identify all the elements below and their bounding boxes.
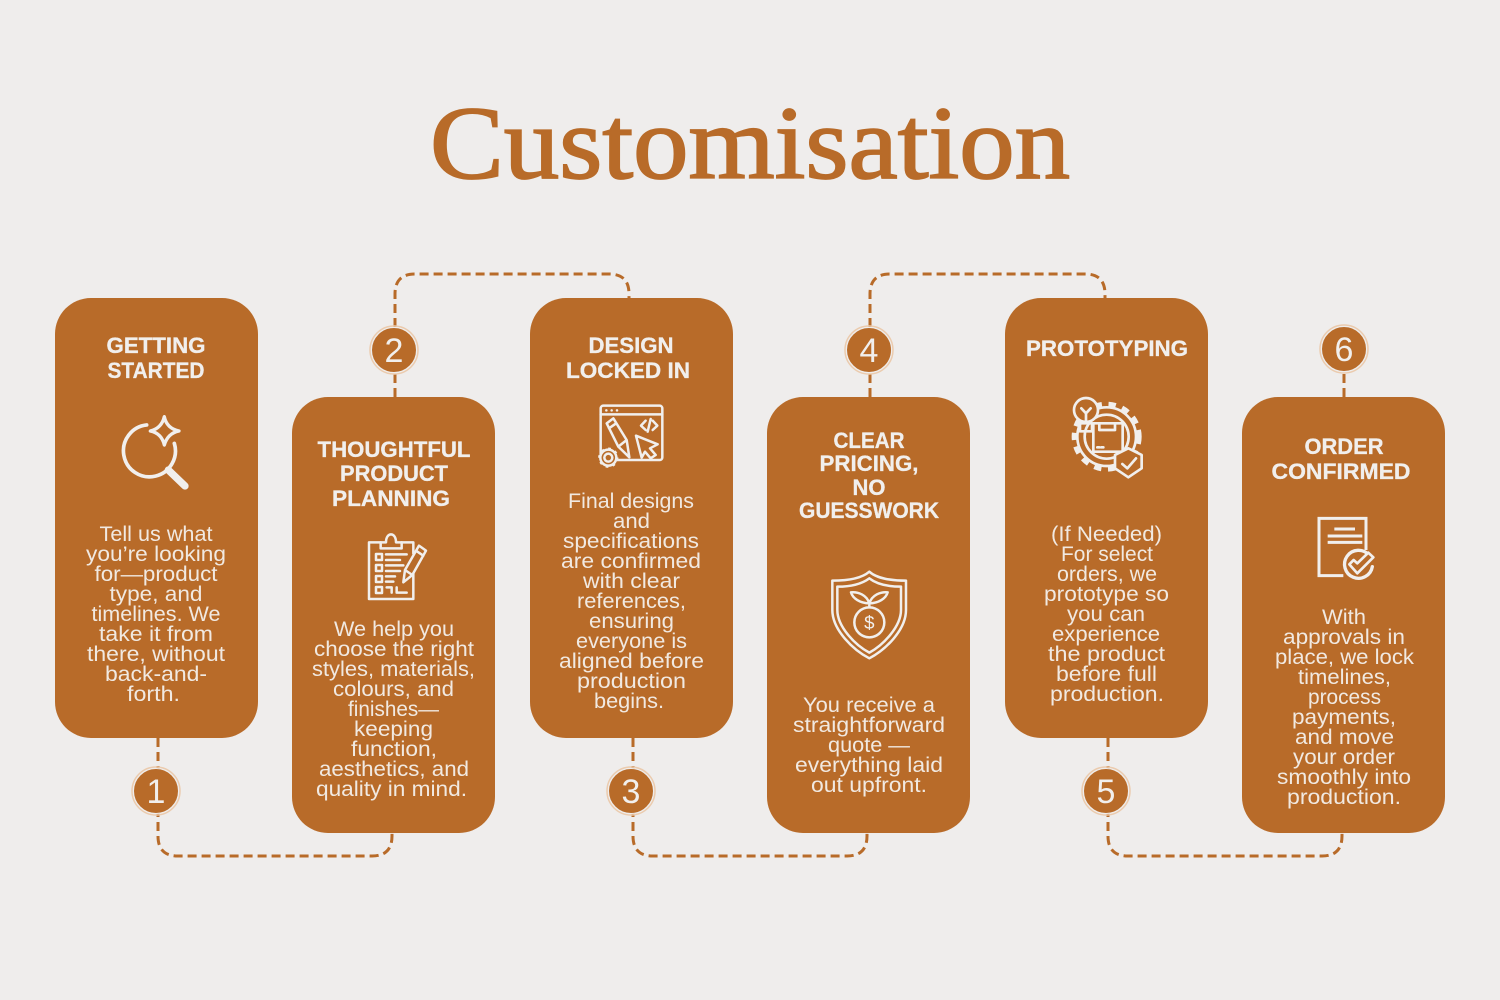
body text: function, [351,738,437,761]
icon: shield with coin and plant: $ [864,612,875,633]
card background [767,397,970,833]
body text: choose the right [314,638,474,661]
icon: shield with coin and plant [832,572,906,658]
card background [55,298,258,738]
body text: the product [1048,643,1165,666]
card background [530,298,733,738]
heading [318,437,470,511]
step number 6: 6 [1335,331,1353,369]
body text: for—product [94,563,218,586]
body text [559,490,704,713]
title: Customisation [430,86,1070,201]
body text: With [1322,606,1366,629]
heading [106,333,206,383]
connector 2 to 3 [395,274,629,397]
body text: approvals in [1283,626,1405,649]
body text: Tell us what [100,523,213,546]
body text: quality in mind. [316,778,467,801]
body text [86,523,226,706]
step number 3: 3 [622,773,640,811]
connector 4 to 5 [870,274,1105,397]
body text: production [577,670,686,693]
body text: production. [1050,683,1164,706]
heading [799,428,939,523]
body text: keeping [354,718,433,741]
body text: back-and- [105,663,207,686]
heading: DESIGN [588,333,674,358]
step number 4: 4 [860,332,878,370]
step number 2: 2 [385,332,403,370]
heading: LOCKED IN [566,358,690,383]
body text: orders, we [1057,563,1157,586]
panel: thoughtful product planning [292,397,495,833]
body text: are confirmed [561,550,701,573]
body text: timelines, [1298,666,1391,689]
body text: everything laid [795,754,943,777]
connector 3 to 4 [633,738,867,856]
heading [566,333,690,383]
body text [793,694,945,797]
body text: you’re looking [86,543,226,566]
step number 5: 5 [1097,773,1115,811]
heading: PLANNING [332,486,450,511]
heading: ORDER [1304,434,1384,459]
body text: We help you [334,618,454,641]
body text: and move [1295,726,1394,749]
step number 3 [607,767,655,815]
body text: there, without [87,643,225,666]
icon: checklist and pencil [369,534,426,599]
body text: experience [1052,623,1160,646]
panel: design locked in [530,298,733,738]
body text: colours, and [333,678,454,701]
body text: specifications [563,530,699,553]
body text: styles, materials, [312,658,475,681]
body text: references, [577,590,686,613]
body text: begins. [594,690,664,713]
heading: PRICING, [820,451,918,476]
panel: order confirmed [1242,397,1445,833]
heading: CONFIRMED [1272,459,1410,484]
step number 5 [1082,767,1130,815]
body text: before full [1056,663,1157,686]
body text: type, and [110,583,202,606]
body text: ensuring [589,610,674,633]
step number 1 [132,767,180,815]
heading [1272,434,1410,484]
body text: process [1308,686,1381,709]
body text: production. [1287,786,1401,809]
body text: For select [1061,543,1153,566]
panel: prototyping [1005,298,1208,738]
step number 6 [1320,325,1368,373]
heading: CLEAR [834,428,905,453]
body text: smoothly into [1277,766,1411,789]
body text: (If Needed) [1051,523,1162,546]
body text: place, we lock [1275,646,1415,669]
body text: out upfront. [811,774,927,797]
heading: THOUGHTFUL [318,437,470,462]
icon: gear, bulb, box and shield [1074,398,1142,477]
body text: everyone is [576,630,687,653]
step number 1: 1 [147,773,165,811]
body text: Final designs [568,490,694,513]
heading: GUESSWORK [799,498,939,523]
body text: take it from [99,623,213,646]
body text: aligned before [559,650,704,673]
icon: design window [599,406,662,467]
icon: document with check [1319,518,1373,578]
panel: getting started [55,298,258,738]
body text: aesthetics, and [319,758,469,781]
body text: prototype so [1044,583,1169,606]
connector 6 to card [1342,372,1346,397]
step number 4 [845,326,893,374]
body text: You receive a [803,694,935,717]
body text [1044,523,1169,706]
connector 5 to 6 [1108,738,1342,856]
icon: magnifier with sparkle [123,417,185,486]
body text: your order [1293,746,1395,769]
body text: timelines. We [92,603,220,626]
card background [1005,298,1208,738]
heading: NO [852,475,886,500]
body text: with clear [582,570,680,593]
connector 1 to 2 [158,738,392,856]
body text: you can [1067,603,1145,626]
card background [1242,397,1445,833]
heading: PRODUCT [340,461,449,486]
body text [312,618,475,801]
body text: quote — [828,734,910,757]
body text: finishes— [348,698,439,721]
heading: STARTED [108,358,204,383]
body text: straightforward [793,714,945,737]
heading: PROTOTYPING [1026,336,1188,361]
step number 2 [370,326,418,374]
panel: clear pricing [767,397,970,833]
heading: GETTING [106,333,206,358]
body text: forth. [127,683,180,706]
card background [292,397,495,833]
body text: payments, [1292,706,1396,729]
body text [1275,606,1415,809]
body text: and [613,510,650,533]
